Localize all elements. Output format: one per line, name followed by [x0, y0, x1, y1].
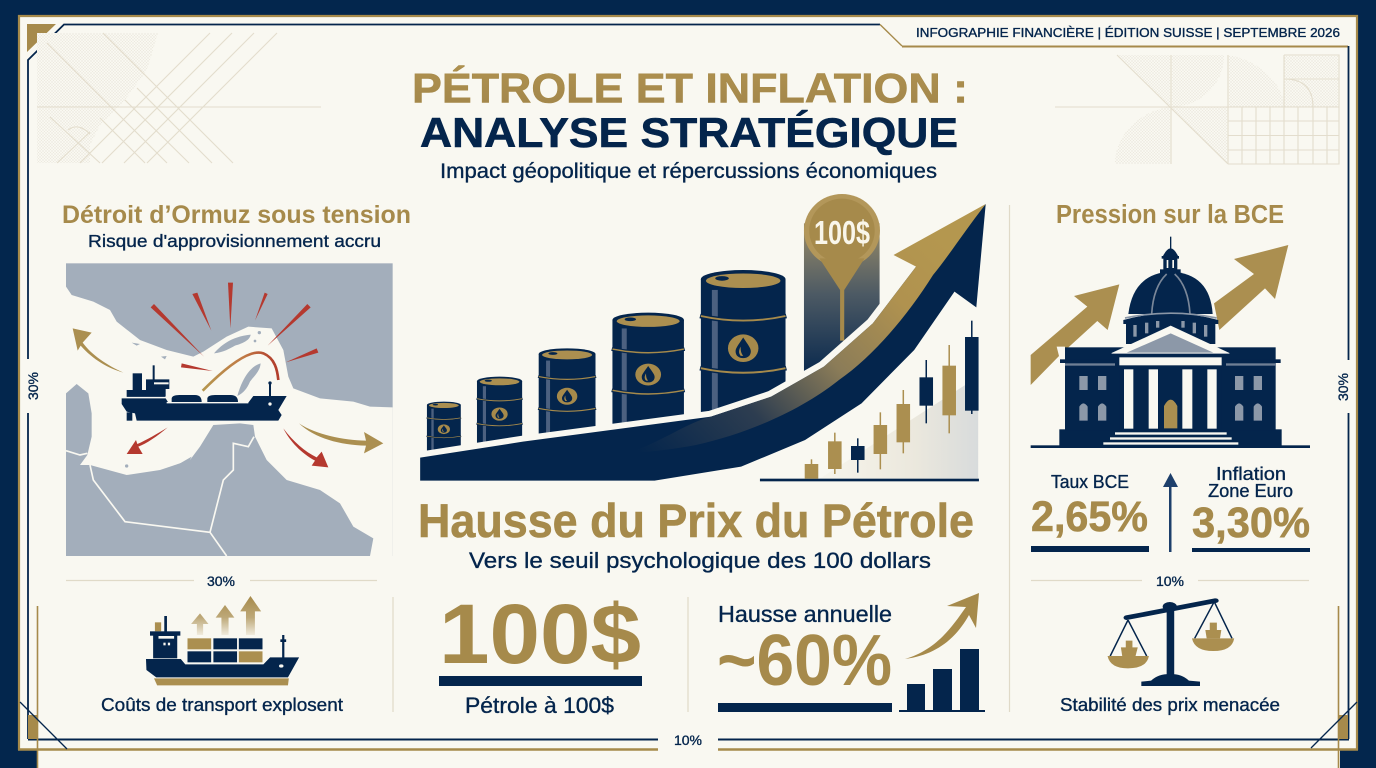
subheading: risque: Risque d'approvisionnement accru	[88, 231, 381, 251]
icon: balance scale	[1108, 601, 1234, 686]
heading: détroit: Détroit d’Ormuz sous tension	[62, 201, 411, 229]
icon: red arrows	[127, 427, 168, 454]
stat: inflation zone euro: Zone Euro	[1208, 481, 1293, 501]
stat: inflation zone euro: 3,30%	[1192, 499, 1310, 547]
caption: stabilité des prix: Stabilité des prix menacée	[1060, 695, 1280, 715]
margin label: 30% left: 30%	[25, 372, 41, 400]
margin label: 10% bottom: 10%	[674, 732, 702, 748]
icon: central bank building with arrows	[1031, 237, 1310, 448]
margin label: 30% right: 30%	[1335, 373, 1351, 401]
heading: hausse du prix: Hausse du Prix du Pétrole	[418, 494, 974, 547]
candlestick chart	[760, 321, 979, 481]
stat: hausse annuelle: ~60%	[717, 621, 892, 701]
stat: inflation zone euro	[1192, 464, 1310, 552]
separator label: 10% right: 10%	[1156, 573, 1184, 589]
panel: pression sur la BCE	[1031, 201, 1310, 448]
subheading: seuil psychologique: Vers le seuil psychologique des 100 dollars	[469, 548, 931, 573]
stat: hausse annuelle: Hausse annuelle	[718, 601, 892, 627]
chart: barrels, arrow and candlesticks	[420, 194, 986, 481]
stat: taux BCE: 2,65%	[1031, 493, 1148, 541]
heading: BCE: Pression sur la BCE	[1056, 201, 1284, 229]
barrels growing in size	[427, 270, 786, 456]
caption: coûts de transport: Coûts de transport explosent	[101, 695, 343, 715]
icon: red tension spikes	[151, 283, 318, 371]
title: PÉTROLE ET INFLATION :	[412, 64, 968, 112]
map of the strait	[66, 263, 393, 556]
icon: mini bars with arrow	[899, 593, 985, 712]
dividers	[393, 205, 1010, 712]
icon: upward arrow between stats	[1163, 473, 1178, 552]
decorative pattern right	[1055, 55, 1339, 164]
decorative pattern left	[37, 33, 321, 163]
title	[412, 64, 968, 156]
separator label: 30% left: 30%	[207, 573, 235, 589]
corner ornament	[27, 24, 56, 52]
icon: container ship with rising arrows	[146, 596, 299, 685]
trend arrow	[420, 204, 986, 481]
stat: taux BCE	[1031, 472, 1149, 552]
subtitle: Impact géopolitique et répercussions économiques	[440, 160, 937, 183]
header edition line: INFOGRAPHIE FINANCIÈRE | ÉDITION SUISSE | SEPTEMBRE 2026	[916, 25, 1340, 40]
stat: 100$: 100$	[439, 587, 641, 681]
panel: détroit d'Ormuz	[62, 201, 411, 556]
stat: inflation zone euro: Inflation	[1216, 464, 1286, 484]
pin: 100 dollars	[804, 194, 880, 380]
label: 100$ pin: 100$	[814, 214, 870, 251]
title: ANALYSE STRATÉGIQUE	[420, 109, 958, 156]
stat: taux BCE: Taux BCE	[1051, 472, 1129, 492]
icon: gold arrows	[73, 328, 123, 373]
stat: 100$	[439, 587, 642, 718]
stat: hausse annuelle	[717, 601, 892, 712]
icon: tanker	[122, 365, 287, 421]
stat: 100$: Pétrole à 100$	[465, 693, 614, 718]
